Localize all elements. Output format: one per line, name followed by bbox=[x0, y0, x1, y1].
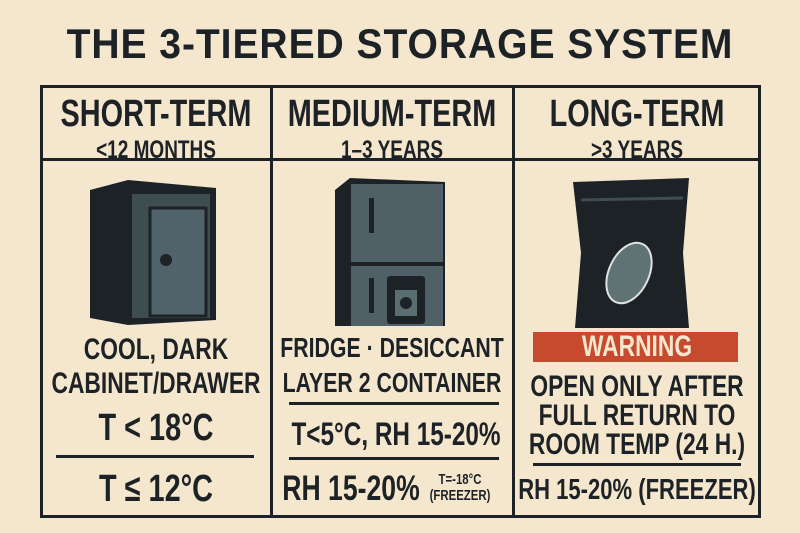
header: medium-term: MEDIUM-TERM bbox=[288, 93, 496, 135]
icon: fridge bbox=[335, 178, 445, 326]
text: (FREEZER) bbox=[430, 487, 490, 504]
header: long-term bbox=[550, 93, 724, 164]
text: T < 18°C bbox=[98, 407, 214, 449]
text: RH 15-20% (FREEZER) bbox=[518, 474, 756, 506]
header: short-term: <12 MONTHS bbox=[96, 136, 216, 164]
header: short-term: SHORT-TERM bbox=[61, 93, 251, 135]
header: long-term: >3 YEARS bbox=[591, 136, 683, 164]
text: RH 15-20% bbox=[282, 469, 420, 508]
title: THE 3-TIERED STORAGE SYSTEM bbox=[67, 20, 733, 67]
text: T<5°C, RH 15-20% bbox=[291, 416, 501, 452]
header: medium-term: 1–3 YEARS bbox=[341, 136, 443, 164]
table frame bbox=[40, 85, 761, 518]
text: short-term details bbox=[52, 333, 260, 400]
text: long-term details: FULL RETURN TO bbox=[539, 399, 735, 432]
text: T=-18°C bbox=[439, 471, 481, 488]
header: long-term: LONG-TERM bbox=[550, 93, 724, 135]
text: medium-term details: LAYER 2 CONTAINER bbox=[283, 367, 501, 398]
text: medium-term details: FRIDGE · DESICCANT bbox=[280, 332, 504, 363]
icon: sealed bag with seed bbox=[573, 178, 689, 328]
text: T ≤ 12°C bbox=[99, 468, 213, 510]
text: WARNING bbox=[582, 330, 692, 363]
icon: cabinet bbox=[90, 180, 216, 325]
header: short-term bbox=[61, 93, 251, 164]
header: medium-term bbox=[288, 93, 496, 164]
text: short-term details: CABINET/DRAWER bbox=[52, 367, 260, 400]
text: long-term details: ROOM TEMP (24 H.) bbox=[529, 428, 745, 461]
text: long-term details: OPEN ONLY AFTER bbox=[530, 370, 744, 403]
text: long-term details bbox=[529, 370, 745, 461]
text: medium-term details bbox=[280, 332, 504, 398]
warning label bbox=[533, 332, 738, 362]
text: short-term details: COOL, DARK bbox=[84, 333, 228, 366]
